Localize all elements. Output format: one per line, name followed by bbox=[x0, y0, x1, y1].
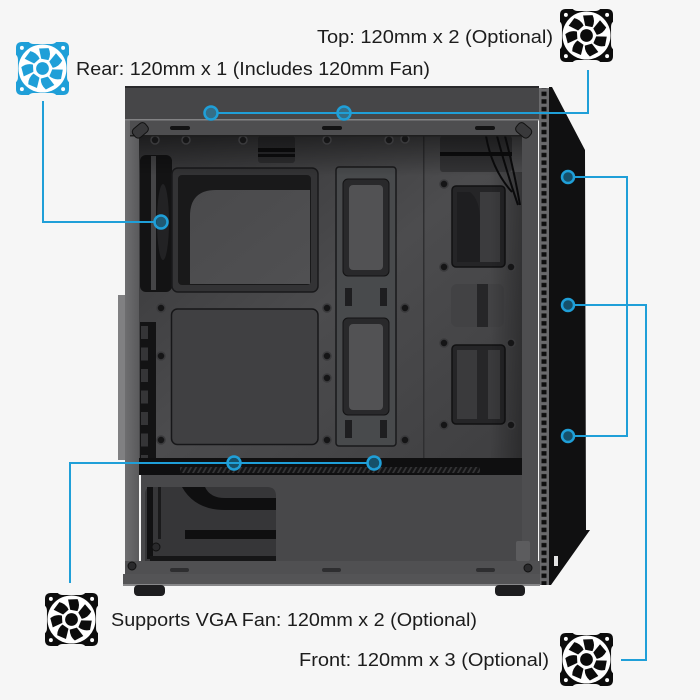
callout: front fans bbox=[299, 171, 646, 686]
right wall bbox=[522, 136, 538, 566]
label: VGA fans: Supports VGA Fan: 120mm x 2 (Optional) bbox=[111, 610, 477, 630]
leader line: top bbox=[204, 70, 588, 120]
left cable comb bbox=[140, 322, 156, 462]
computer case bbox=[118, 86, 590, 596]
top cable notch bbox=[258, 136, 295, 163]
perforated front strip bbox=[539, 88, 549, 585]
power supply shroud bbox=[141, 475, 522, 565]
shroud opening bbox=[145, 487, 276, 562]
leader line: VGA bbox=[70, 456, 380, 583]
left wall bbox=[125, 120, 139, 565]
centre bracket bbox=[336, 167, 396, 446]
icon: blue rear fan bbox=[16, 42, 69, 95]
callout: rear fan bbox=[16, 42, 430, 228]
callout: top fans bbox=[204, 9, 613, 120]
callout: VGA fans bbox=[45, 456, 477, 646]
top panel bbox=[125, 86, 539, 140]
icon: black VGA fan bbox=[45, 593, 98, 646]
front panel bbox=[549, 87, 590, 585]
right side cutouts bbox=[423, 136, 512, 464]
leader line: front bbox=[562, 171, 646, 660]
plate shading bbox=[139, 136, 522, 462]
CPU cutout upper bbox=[172, 168, 318, 292]
icon: black front fan bbox=[560, 633, 613, 686]
front panel logo mark bbox=[554, 556, 558, 566]
bottom rail bbox=[123, 541, 540, 586]
case feet bbox=[134, 585, 525, 596]
internal cables bbox=[486, 136, 520, 205]
label: top fans: Top: 120mm x 2 (Optional) bbox=[317, 27, 553, 47]
rear fan bbox=[140, 155, 172, 292]
icon: black top fan bbox=[560, 9, 613, 62]
label: front fans: Front: 120mm x 3 (Optional) bbox=[299, 650, 549, 670]
label: rear fan: Rear: 120mm x 1 (Includes 120mm Fan) bbox=[76, 59, 430, 79]
lower plate panel bbox=[172, 309, 318, 444]
interior back plate bbox=[139, 136, 522, 464]
bottom vent gap bbox=[139, 458, 522, 475]
mounting screws bbox=[151, 135, 515, 444]
rear expansion bracket bbox=[118, 295, 126, 460]
leader line: rear bbox=[43, 101, 168, 228]
